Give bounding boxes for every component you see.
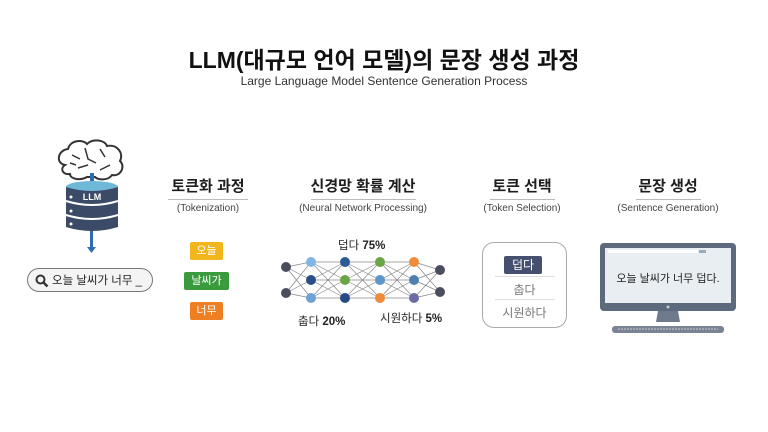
selection box xyxy=(482,242,567,328)
search box xyxy=(27,268,153,292)
heading: token selection: 토큰 선택 xyxy=(492,178,552,195)
heading: neural network: 신경망 확률 계산 xyxy=(311,178,415,195)
token 오늘: 오늘 xyxy=(196,245,217,257)
heading: sentence generation: 문장 생성 xyxy=(638,178,698,195)
title: LLM(대규모 언어 모델)의 문장 생성 과정 xyxy=(189,47,579,73)
token 너무 xyxy=(190,302,223,320)
generated sentence: 오늘 날씨가 너무 덥다. xyxy=(616,273,720,285)
subheading: token selection: (Token Selection) xyxy=(483,203,561,214)
label: 덥다 75%: 덥다 75% xyxy=(338,240,385,252)
selected token 덥다: 덥다 xyxy=(512,258,534,272)
token 오늘 xyxy=(190,242,223,260)
token 날씨가: 날씨가 xyxy=(191,275,222,287)
neural network chart xyxy=(281,257,445,303)
subheading: sentence generation: (Sentence Generation) xyxy=(617,203,719,214)
icon: monitor with sentence xyxy=(600,243,736,333)
icon: magnifier xyxy=(36,274,48,288)
tokens xyxy=(184,242,229,320)
token 너무: 너무 xyxy=(196,305,217,317)
icon: brain and LLM database xyxy=(58,139,124,253)
label: 시원하다 5%: 시원하다 5% xyxy=(380,313,442,325)
label: 춥다 20%: 춥다 20% xyxy=(298,316,345,328)
heading: tokenization: 토큰화 과정 xyxy=(171,178,245,195)
subheading: neural network: (Neural Network Processing) xyxy=(299,203,427,214)
selected token 덥다 xyxy=(504,256,542,274)
option 춥다: 춥다 xyxy=(513,283,536,297)
search box: 오늘 날씨가 너무 _ xyxy=(52,275,142,287)
subheading: tokenization: (Tokenization) xyxy=(177,203,239,214)
subtitle: Large Language Model Sentence Generation Process xyxy=(241,74,527,88)
option 시원하다: 시원하다 xyxy=(502,306,547,320)
icon: brain and LLM database: LLM xyxy=(83,192,101,202)
token 날씨가 xyxy=(184,272,229,290)
